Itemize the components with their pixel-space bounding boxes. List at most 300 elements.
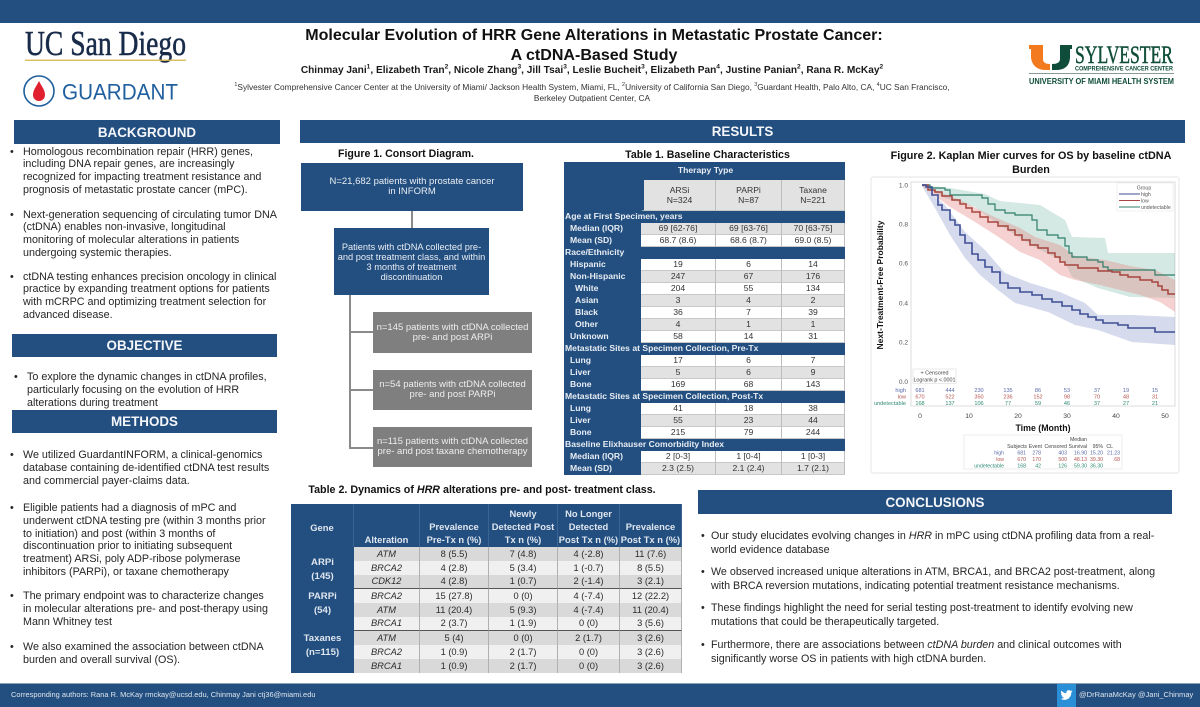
title: A ctDNA-Based Study: [511, 46, 677, 64]
numbers at risk: 236: [1003, 394, 1013, 400]
survival summary table: CL: [1106, 444, 1113, 450]
table: baseline characteristics: N=324: [667, 195, 692, 205]
table: baseline characteristics: 23: [744, 415, 753, 425]
table: HRR alteration dynamics: PARPi: [308, 591, 337, 602]
text: •: [10, 590, 14, 602]
numbers at risk: 19: [1123, 388, 1129, 394]
table: baseline characteristics: 1 [0-3]: [801, 451, 825, 461]
numbers at risk: [874, 388, 1158, 407]
numbers at risk: 522: [945, 394, 955, 400]
table: HRR alteration dynamics: BRCA2: [371, 590, 402, 600]
table: baseline characteristics: 4: [676, 319, 680, 329]
numbers at risk: 168: [915, 401, 925, 407]
affiliations: Berkeley Outpatient Center, CA: [534, 93, 650, 103]
survival curve: undetectable: [922, 185, 1175, 275]
censored note: Logrank p <.0001: [913, 378, 956, 384]
box: ctDNA collected pre and post: discontinuation: [381, 272, 442, 282]
survival summary table: 42: [1035, 464, 1041, 470]
survival summary table: Censored: [1044, 444, 1067, 450]
table: HRR alteration dynamics: 2 (1.7): [575, 632, 602, 642]
box: taxane cohort: n=115 patients with ctDNA collected: [377, 436, 528, 447]
numbers at risk: 350: [974, 394, 984, 400]
table: baseline characteristics: 2.1 (2.4): [732, 463, 764, 473]
table: baseline characteristics: [564, 162, 845, 475]
legend: group: high: [1141, 192, 1151, 198]
survival summary table: 670: [1017, 457, 1026, 463]
table: HRR alteration dynamics: 4 (-7.4): [574, 590, 603, 600]
heading: conclusions: CONCLUSIONS: [886, 494, 984, 510]
table: HRR alteration dynamics: Detected Post: [492, 521, 554, 532]
text: background bullets: undergoing systemic therapies.: [23, 247, 172, 259]
table: HRR alteration dynamics: 12 (22.2): [632, 590, 669, 600]
footer: twitter handles: @DrRanaMcKay @Jani_Chinmay: [1079, 690, 1193, 699]
table: HRR alteration dynamics: ATM: [377, 548, 396, 558]
text: •: [10, 641, 14, 653]
table: HRR alteration dynamics: CDK12: [372, 576, 401, 586]
table: baseline characteristics: 69 [63-76]: [729, 223, 768, 233]
x axis labels: 50: [1161, 413, 1169, 420]
text: methods bullets: The primary endpoint was to characterize changes: [23, 590, 264, 602]
text: objective: To explore the dynamic changes in ctDNA profiles,: [27, 371, 267, 383]
table: HRR alteration dynamics: Post Tx n (%): [621, 534, 680, 545]
table: HRR alteration dynamics: 1 (0.9): [441, 660, 467, 670]
numbers at risk: 21: [1152, 401, 1158, 407]
table: HRR alteration dynamics: Tx n (%): [505, 534, 541, 545]
x axis labels: 10: [965, 413, 973, 420]
table: HRR alteration dynamics: 4 (-7.4): [574, 604, 603, 614]
text: •: [10, 502, 14, 514]
connector: branch trunk: [349, 295, 351, 449]
table: HRR alteration dynamics: 4 (2.8): [441, 576, 467, 586]
table: baseline characteristics: Non-Hispanic: [570, 271, 625, 281]
table: HRR alteration dynamics: 0 (0): [579, 660, 598, 670]
table: baseline characteristics: 68.7 (8.6): [660, 235, 696, 245]
table: HRR alteration dynamics: 2 (1.7): [510, 660, 536, 670]
logo: Guardant: [23, 75, 178, 107]
survival summary table: 403: [1058, 450, 1067, 456]
box: ARPi cohort: n=145 patients with ctDNA collected: [377, 322, 528, 332]
text: methods bullets: database containing de-identified ctDNA test results: [23, 462, 269, 474]
survival summary table: 500: [1058, 457, 1067, 463]
table: baseline characteristics: Bone: [570, 379, 591, 389]
text: •: [701, 639, 705, 651]
table: HRR alteration dynamics: 11 (20.4): [632, 604, 669, 614]
table: baseline characteristics: 14: [808, 259, 818, 269]
table: HRR alteration dynamics: 3 (2.1): [637, 576, 664, 586]
box: total patients: in INFORM: [388, 186, 436, 197]
table: HRR alteration dynamics: ATM: [377, 632, 396, 642]
legend: group: Group: [1137, 186, 1151, 192]
table: baseline characteristics: Lung: [570, 355, 591, 365]
text: methods bullets: discontinuation prior to initiating subsequent: [23, 540, 232, 552]
table: baseline characteristics: Taxane: [799, 184, 827, 194]
table: baseline characteristics: Metastatic Sites at Specimen Collection, Pre-Tx: [565, 343, 758, 353]
table: baseline characteristics: 31: [808, 331, 818, 341]
survival summary table: high: [994, 450, 1004, 456]
connector: branch to ARPi: [349, 331, 373, 333]
numbers at risk: low: [898, 394, 907, 400]
box: total patients: N=21,682 patients with prostate cancer: [329, 176, 495, 187]
footer: corresponding authors: Corresponding authors: Rana R. McKay rmckay@ucsd.edu, Chinmay Jani ctj36@miami.edu: [11, 690, 315, 699]
table: HRR alteration dynamics: 5 (3.4): [510, 562, 536, 572]
numbers at risk: 137: [945, 401, 955, 407]
text: background bullets: ctDNA testing enhances precision oncology in clinical: [23, 271, 276, 283]
table: HRR alteration dynamics: BRCA2: [371, 646, 402, 656]
survival summary table: 21.23: [1107, 450, 1120, 456]
box: ctDNA collected pre and post: 3 months of treatment: [366, 262, 456, 272]
survival summary table: .68: [1113, 457, 1120, 463]
survival summary table: undetectable: [974, 464, 1004, 470]
table: baseline characteristics: 1 [0-4]: [736, 451, 761, 461]
table: HRR alteration dynamics: ATM: [377, 604, 396, 614]
survival summary table: 16.90: [1074, 450, 1087, 456]
table: baseline characteristics: 143: [806, 379, 820, 389]
table: baseline characteristics: Bone: [570, 427, 591, 437]
text: methods bullets: Mann Whitney test: [23, 616, 112, 628]
survival summary table: 681: [1017, 450, 1026, 456]
table: baseline characteristics: 247: [671, 271, 685, 281]
box: taxane cohort: pre- and post taxane chemotherapy: [378, 446, 527, 457]
numbers at risk: 681: [915, 388, 925, 394]
survival summary table: 48.13: [1074, 457, 1087, 463]
table: HRR alteration dynamics: Post Tx n (%): [559, 534, 618, 545]
numbers at risk: 31: [1152, 394, 1158, 400]
heading: objective: OBJECTIVE: [107, 338, 182, 353]
table: HRR alteration dynamics: BRCA1: [371, 660, 402, 670]
table: baseline characteristics: N=221: [800, 195, 826, 205]
text: background bullets: recognized for impacting treatment resistance and: [23, 171, 261, 183]
table: baseline characteristics: 176: [806, 271, 820, 281]
table: HRR alteration dynamics: 5 (4): [444, 632, 464, 642]
heading: conclusions: [698, 490, 1172, 514]
heading: methods: [12, 410, 277, 433]
text: objective: alterations during treatment: [27, 397, 158, 409]
heading: methods: METHODS: [111, 414, 178, 429]
y axis labels: 0.2: [899, 340, 908, 346]
table: baseline characteristics: 70 [63-75]: [794, 223, 832, 233]
text: methods bullets: burden and overall survival (OS).: [23, 654, 180, 666]
numbers at risk: 444: [945, 388, 955, 394]
numbers at risk: 53: [1064, 388, 1070, 394]
text: objective: [14, 371, 267, 409]
table: HRR alteration dynamics: 0 (0): [579, 646, 598, 656]
table: baseline characteristics: 58: [673, 331, 683, 341]
survival summary table: [964, 435, 1122, 470]
table: baseline characteristics: Age at First Specimen, years: [565, 211, 682, 221]
survival summary table: 59.30: [1074, 464, 1087, 470]
table: HRR alteration dynamics: 3 (2.6): [637, 632, 664, 642]
table: baseline characteristics: Race/Ethnicity: [565, 247, 624, 257]
numbers at risk: 106: [974, 401, 984, 407]
table: baseline characteristics: 1: [746, 319, 751, 329]
authors: Chinmay Jani1, Elizabeth Tran2, Nicole Zhang3, Jill Tsai3, Leslie Bucheit3, Elizabeth Pan4, Justine Panian2, Rana R. McKay2: [301, 64, 883, 76]
table: baseline characteristics: 6: [746, 355, 751, 365]
heading: table 1: Table 1. Baseline Characteristics: [625, 149, 790, 161]
heading: table 2: Table 2. Dynamics of HRR alterations pre- and post- treatment class.: [308, 484, 656, 496]
table: baseline characteristics: Hispanic: [570, 259, 606, 269]
table: baseline characteristics: Unknown: [570, 331, 609, 341]
survival summary table: 278: [1032, 450, 1041, 456]
table: baseline characteristics: ARSi: [670, 184, 689, 194]
table: HRR alteration dynamics: 2 (1.7): [510, 646, 536, 656]
text: conclusions bullets: Furthermore, there are associations between ctDNA burden and clinical outcomes with: [711, 639, 1122, 651]
table: baseline characteristics: 69.0 (8.5): [795, 235, 831, 245]
numbers at risk: 98: [1064, 394, 1070, 400]
logo: Sylvester: COMPREHENSIVE CANCER CENTER: [1075, 66, 1174, 72]
table: HRR alteration dynamics: 3 (2.6): [637, 646, 664, 656]
text: methods bullets: inhibitors (PARPi), or taxane chemotherapy: [23, 566, 229, 578]
table: baseline characteristics: Liver: [570, 367, 591, 377]
table: baseline characteristics: 169: [671, 379, 685, 389]
y axis labels: 0.8: [899, 222, 908, 228]
table: baseline characteristics: Liver: [570, 415, 591, 425]
numbers at risk: 59: [1035, 401, 1041, 407]
box: taxane cohort: [373, 427, 532, 467]
table: baseline characteristics: Median (IQR): [570, 451, 623, 461]
logo: Guardant: GUARDANT: [62, 80, 178, 104]
x axis labels: 20: [1014, 413, 1022, 420]
survival summary table: Median: [1070, 437, 1087, 443]
numbers at risk: 670: [915, 394, 925, 400]
table: baseline characteristics: White: [575, 283, 598, 293]
text: •: [10, 449, 14, 461]
text: methods bullets: [10, 449, 269, 666]
table: HRR alteration dynamics: Taxanes: [304, 633, 341, 644]
table: baseline characteristics: 36: [673, 307, 683, 317]
table: baseline characteristics: 6: [746, 367, 751, 377]
table: baseline characteristics: Metastatic Sites at Specimen Collection, Post-Tx: [565, 391, 763, 401]
table: HRR alteration dynamics: 7 (4.8): [510, 548, 536, 558]
heading: background: [14, 120, 280, 144]
text: conclusions bullets: world evidence database: [711, 544, 830, 556]
table: HRR alteration dynamics: Newly: [509, 508, 537, 519]
table: baseline characteristics: PARPi: [736, 184, 761, 194]
table: baseline characteristics: 2 [0-3]: [666, 451, 690, 461]
censored note: [913, 369, 956, 384]
legend: group: undetectable: [1141, 205, 1171, 211]
table: baseline characteristics: 5: [676, 367, 680, 377]
survival curve: high: [922, 185, 1175, 332]
table: HRR alteration dynamics: Gene: [310, 522, 334, 533]
connector: top to second box: [411, 211, 413, 228]
table: HRR alteration dynamics: Detected: [569, 521, 608, 532]
y axis labels: 0.0: [899, 379, 908, 386]
table: baseline characteristics: 17: [673, 355, 683, 365]
y axis labels: [899, 182, 908, 386]
numbers at risk: undetectable: [874, 401, 906, 407]
table: HRR alteration dynamics: 0 (0): [513, 590, 533, 600]
heading: figure 2: Burden: [1012, 164, 1050, 176]
survival curve: low: [922, 185, 1175, 294]
table: baseline characteristics: Therapy Type: [678, 165, 733, 175]
box: ARPi cohort: pre- and post ARPi: [413, 332, 492, 342]
x axis labels: [918, 413, 1169, 420]
text: objective: particularly focusing on the evolution of HRR: [27, 384, 239, 396]
table: HRR alteration dynamics: Pre-Tx n (%): [427, 534, 481, 545]
legend: group: [1117, 183, 1173, 211]
box: ctDNA collected pre and post: Patients with ctDNA collected pre-: [342, 242, 481, 252]
table: HRR alteration dynamics: [291, 504, 682, 673]
x axis title: Time (Month): [1015, 423, 1071, 433]
survival summary table: Subjects: [1007, 444, 1027, 450]
text: methods bullets: and commercial payer-claims data.: [23, 475, 190, 487]
table: baseline characteristics: 39: [808, 307, 818, 317]
text: •: [701, 566, 705, 578]
text: background bullets: with mCRPC and optimizing treatment selection for: [23, 296, 266, 308]
box: PARPi cohort: n=54 patients with ctDNA collected: [379, 379, 526, 390]
table: HRR alteration dynamics: 4 (2.8): [441, 562, 467, 572]
box: total patients: [301, 163, 523, 211]
table: HRR alteration dynamics: No Longer: [565, 508, 612, 519]
affiliations: [234, 82, 950, 103]
logo: Sylvester: [1029, 42, 1174, 86]
numbers at risk: 77: [1005, 401, 1011, 407]
text: methods bullets: underwent ctDNA testing pre (within 3 months prior: [23, 515, 266, 527]
table: baseline characteristics: N=87: [738, 195, 759, 205]
table: baseline characteristics: Lung: [570, 403, 591, 413]
connector: branch to taxane: [349, 447, 373, 449]
table: HRR alteration dynamics: 3 (2.6): [637, 660, 664, 670]
text: background bullets: advanced disease.: [23, 309, 113, 321]
text: conclusions bullets: significantly worse OS in patients with high ctDNA burden.: [711, 652, 986, 664]
table: HRR alteration dynamics: 0 (0): [513, 632, 533, 642]
survival summary table: 126: [1058, 464, 1067, 470]
table: baseline characteristics: 1: [811, 319, 815, 329]
survival summary table: Event: [1029, 444, 1043, 450]
numbers at risk: 15: [1152, 388, 1158, 394]
table: baseline characteristics: 3: [676, 295, 680, 305]
table: baseline characteristics: 244: [806, 427, 820, 437]
text: conclusions bullets: [701, 530, 1155, 664]
table: HRR alteration dynamics: 5 (9.3): [510, 604, 536, 614]
icon: twitter: [1057, 684, 1076, 707]
heading: results: RESULTS: [712, 124, 773, 139]
table: baseline characteristics: 69 [62-76]: [659, 223, 697, 233]
table: baseline characteristics: 134: [806, 283, 820, 293]
title: [305, 26, 883, 64]
table: HRR alteration dynamics: 2 (3.7): [441, 618, 467, 628]
table: HRR alteration dynamics: 11 (20.4): [436, 604, 472, 614]
survival summary table: 39.30: [1090, 457, 1103, 463]
numbers at risk: 37: [1094, 401, 1100, 407]
text: background bullets: monitoring of molecular alterations in patients: [23, 234, 239, 246]
text: •: [701, 530, 705, 542]
survival summary table: 15.20: [1090, 450, 1103, 456]
table: baseline characteristics: 4: [746, 295, 751, 305]
table: HRR alteration dynamics: 1 (0.9): [441, 646, 467, 656]
title: Molecular Evolution of HRR Gene Alterations in Metastatic Prostate Cancer:: [305, 26, 883, 44]
text: conclusions bullets: mutations that could be therapeutically targeted.: [711, 616, 939, 628]
numbers at risk: 48: [1123, 394, 1129, 400]
table: baseline characteristics: 55: [744, 283, 753, 293]
confidence bands: [922, 185, 1175, 345]
table: baseline characteristics: Mean (SD): [570, 463, 612, 473]
table: baseline characteristics: Baseline Elixhauser Comorbidity Index: [565, 439, 724, 449]
table: baseline characteristics: 9: [811, 367, 815, 377]
survival summary table: 168: [1017, 464, 1026, 470]
text: conclusions bullets: with BRCA reversion mutations, indicating potential treatment resistance mechanisms.: [711, 580, 1120, 592]
chart: Kaplan-Meier curves: [870, 176, 1180, 474]
numbers at risk: 135: [1003, 388, 1013, 394]
x axis labels: 30: [1063, 413, 1071, 420]
connector: branch to PARPi: [349, 389, 373, 391]
box: PARPi cohort: [373, 370, 532, 410]
table: HRR alteration dynamics: BRCA1: [371, 618, 402, 628]
table: baseline characteristics: 6: [746, 259, 751, 269]
table: baseline characteristics: 68: [744, 379, 753, 389]
survival summary table: Survival: [1069, 444, 1087, 450]
text: methods bullets: to initiation) and post (within 3 months of: [23, 528, 215, 540]
y axis labels: 0.4: [899, 300, 908, 308]
heading: results: [300, 120, 1185, 143]
table: HRR alteration dynamics: (n=115): [306, 647, 339, 658]
table: baseline characteristics: 41: [673, 403, 683, 413]
box: ctDNA collected pre and post: and post treatment class, and within: [338, 252, 485, 262]
table: baseline characteristics: 68.6 (8.7): [730, 235, 767, 245]
table: baseline characteristics: 1.7 (2.1): [797, 463, 829, 473]
text: background bullets: prognosis of metastatic prostate cancer (mPC).: [23, 184, 248, 196]
table: baseline characteristics: Black: [575, 307, 598, 317]
numbers at risk: 152: [1033, 394, 1043, 400]
survival summary table: 95%: [1093, 444, 1103, 450]
table: HRR alteration dynamics: Alteration: [365, 534, 408, 545]
y axis labels: 1.0: [899, 182, 908, 190]
text: •: [10, 209, 14, 221]
heading: figure 1: Figure 1. Consort Diagram.: [338, 148, 474, 160]
numbers at risk: 230: [974, 388, 984, 394]
table: HRR alteration dynamics: ARPi: [311, 557, 334, 568]
table: HRR alteration dynamics: 0 (0): [579, 618, 598, 628]
text: methods bullets: We also examined the association between ctDNA: [23, 641, 264, 653]
top header band: [0, 0, 1200, 23]
numbers at risk: 37: [1094, 388, 1100, 394]
table: baseline characteristics: Asian: [575, 295, 598, 305]
numbers at risk: 86: [1035, 388, 1041, 394]
legend: group: low: [1141, 198, 1149, 204]
table: HRR alteration dynamics: BRCA2: [371, 562, 402, 572]
table: HRR alteration dynamics: 1 (-0.7): [574, 562, 603, 572]
survival summary table: 36.30: [1090, 464, 1103, 470]
table: baseline characteristics: 55: [673, 415, 683, 425]
numbers at risk: high: [895, 388, 906, 394]
heading: figure 2: Figure 2. Kaplan Mier curves for OS by baseline ctDNA: [891, 150, 1171, 162]
censored note: + Censored: [920, 370, 949, 376]
table: baseline characteristics: 215: [671, 427, 685, 437]
table: baseline characteristics: Mean (SD): [570, 235, 612, 245]
text: background bullets: including DNA repair genes, are increasingly: [23, 158, 235, 170]
heading: objective: [12, 334, 277, 357]
survival summary table: low: [996, 457, 1004, 463]
text: methods bullets: We utilized GuardantINFORM, a clinical-genomics: [23, 449, 262, 461]
table: HRR alteration dynamics: 4 (-2.8): [574, 548, 603, 558]
table: baseline characteristics: 2.3 (2.5): [662, 463, 694, 473]
table: baseline characteristics: 7: [811, 355, 815, 365]
table: HRR alteration dynamics: Prevalence: [429, 521, 479, 532]
table: baseline characteristics: 2: [811, 295, 815, 305]
survival summary table: 170: [1032, 457, 1041, 463]
table: HRR alteration dynamics: (54): [314, 605, 331, 616]
x axis labels: 40: [1112, 413, 1120, 420]
numbers at risk: 27: [1123, 401, 1129, 407]
text: conclusions bullets: Our study elucidates evolving changes in HRR in mPC using ctDNA profiling data from a real-: [711, 530, 1154, 542]
table: baseline characteristics: 44: [808, 415, 818, 425]
footer band: [0, 683, 1200, 707]
table: HRR alteration dynamics: (145): [311, 571, 334, 582]
diagram: consort flow: [301, 163, 532, 467]
table: baseline characteristics: 19: [673, 259, 683, 269]
table: baseline characteristics: Median (IQR): [570, 223, 623, 233]
numbers at risk: 46: [1064, 401, 1070, 407]
